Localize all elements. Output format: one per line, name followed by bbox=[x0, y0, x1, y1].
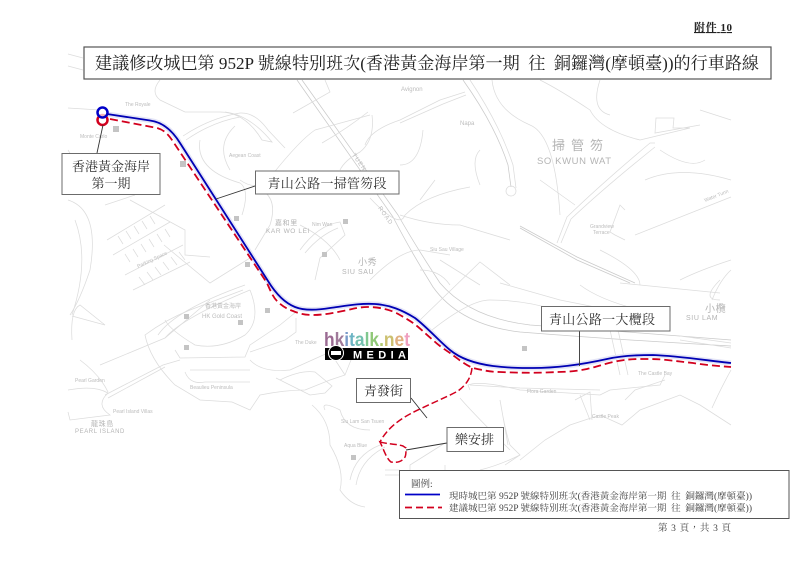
map place names: Aqua Blue bbox=[344, 443, 367, 449]
legend: existing route: 現時城巴第 952P 號線特別班次(香港黃金海岸第一期 往 銅鑼灣(摩頓臺)) bbox=[449, 490, 752, 501]
callout: 青山公路一大欖段: 青山公路一大欖段 bbox=[549, 312, 655, 327]
callout: 香港黃金海岸第一期: 第一期 bbox=[91, 176, 131, 191]
map place names: SO KWUN WAT bbox=[537, 156, 612, 167]
map place names: Pearl Garden bbox=[75, 378, 105, 384]
map place names: 小秀 bbox=[358, 256, 377, 267]
legend heading: 圖例: bbox=[411, 478, 433, 490]
map place names: Monte Carlo bbox=[80, 134, 107, 140]
base map bbox=[68, 54, 731, 510]
map place names: Siu Lam San Tsuen bbox=[341, 419, 384, 425]
legend: proposed route: 建議城巴第 952P 號線特別班次(香港黃金海岸第一期 往 銅鑼灣(摩頓臺)) bbox=[449, 502, 752, 513]
callout: 青山公路一掃管笏段: 青山公路一掃管笏段 bbox=[268, 176, 386, 191]
map place names: Nim Wan bbox=[312, 222, 333, 228]
map place names: Water Tunn bbox=[704, 189, 730, 204]
callout: 青發街: 青發街 bbox=[364, 384, 403, 398]
map place names: 小欖 bbox=[705, 302, 726, 315]
title box: 建議修改城巴第 952P 號線特別班次(香港黃金海岸第一期 往 銅鑼灣(摩頓臺))的行車路線 bbox=[95, 53, 759, 73]
icon: blue start circle bbox=[98, 108, 108, 118]
map place names bbox=[75, 87, 730, 460]
callout: 青山公路一掃管笏段 bbox=[216, 171, 399, 199]
map place names: 香港黃金海岸 bbox=[205, 302, 241, 310]
watermark logo: hkitalk.net media bbox=[324, 330, 411, 362]
map place names: Grandview bbox=[590, 224, 614, 230]
map place names: Pearl Island Villas bbox=[113, 409, 153, 415]
map place names: KAR WO LEI bbox=[266, 228, 310, 235]
map place names: TUEN MUN bbox=[350, 153, 378, 189]
map place names: Napa bbox=[460, 121, 475, 127]
map place names: ROAD bbox=[376, 206, 394, 227]
map place names: 嘉和里 bbox=[275, 218, 298, 227]
map place names: 龍珠島 bbox=[91, 419, 114, 428]
map place names: The Castle Bay bbox=[638, 371, 673, 377]
callout: 樂安排: 樂安排 bbox=[455, 432, 494, 447]
map place names: Flora Garden bbox=[527, 389, 557, 395]
proposed route: red dashed line bbox=[98, 115, 731, 462]
watermark logo: hkitalk.net media: MEDIA bbox=[353, 350, 406, 362]
annex label: 附件 10 bbox=[694, 20, 732, 34]
map place names: The Duke bbox=[295, 340, 317, 346]
page number: 第 3 頁，共 3 頁 bbox=[658, 522, 731, 534]
existing route: blue line bbox=[107, 114, 731, 368]
map place names: The Royale bbox=[125, 102, 151, 108]
map roads and coastlines bbox=[68, 54, 731, 510]
callout: 樂安排 bbox=[406, 428, 504, 452]
map place names: Siu Sau Village bbox=[430, 247, 464, 253]
map place names: 掃管笏 bbox=[552, 138, 609, 153]
map place names: HK Gold Coast bbox=[202, 314, 242, 320]
title box bbox=[84, 47, 771, 79]
map place names: SIU SAU bbox=[342, 269, 374, 276]
watermark logo: hkitalk.net media: hkitalk.net bbox=[324, 330, 411, 351]
map place names: SIU LAM bbox=[686, 315, 718, 322]
map place names: Avignon bbox=[401, 87, 423, 93]
map place names: Parking Space bbox=[136, 251, 169, 270]
callout: 青山公路一大欖段 bbox=[542, 306, 670, 366]
callout: 香港黃金海岸第一期: 香港黃金海岸 bbox=[72, 159, 150, 174]
map place names: Terrace bbox=[593, 230, 610, 236]
legend bbox=[400, 470, 789, 518]
callout: 青發街 bbox=[356, 378, 427, 418]
map place names: PEARL ISLAND bbox=[75, 429, 125, 435]
map place names: Beaulieu Peninsula bbox=[190, 385, 233, 391]
map place names: Castle Peak bbox=[592, 414, 619, 420]
map place names: Aegean Coast bbox=[229, 153, 261, 159]
callout: 香港黃金海岸第一期 bbox=[62, 125, 160, 194]
icon: red start circle bbox=[98, 115, 108, 125]
